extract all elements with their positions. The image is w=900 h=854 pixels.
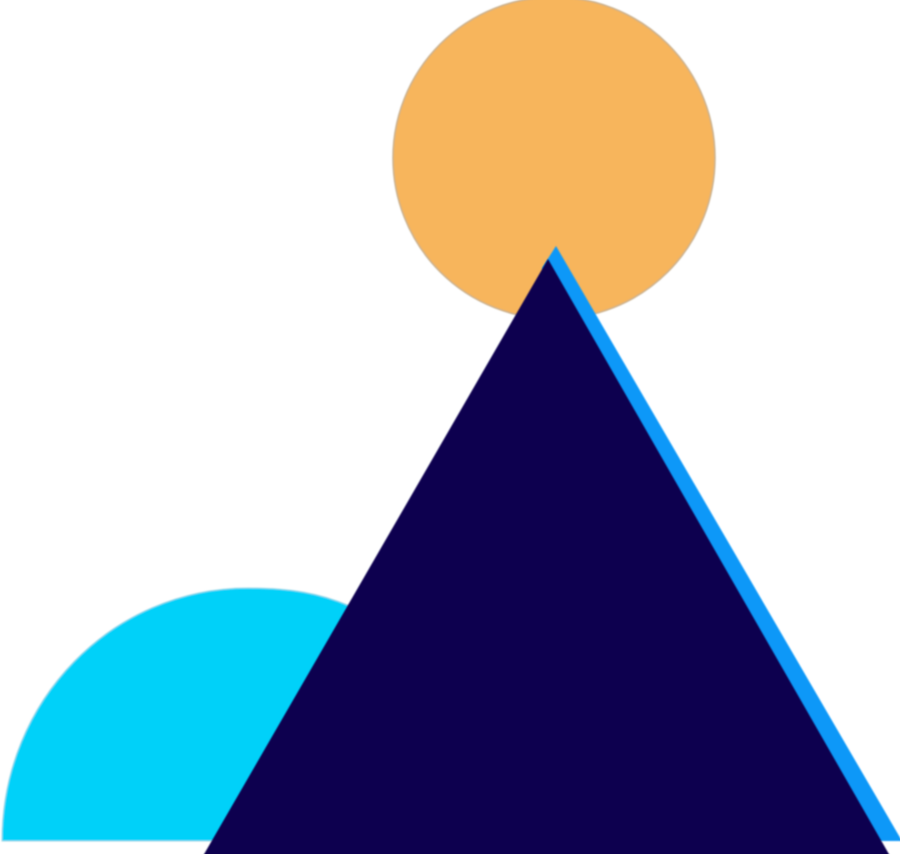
icon: blue mountain edge bbox=[542, 246, 900, 841]
icon: navy triangular mountain bbox=[203, 259, 890, 854]
icon: orange sun circle bbox=[393, 0, 715, 319]
icon: cyan semicircle hill bbox=[2, 588, 350, 841]
